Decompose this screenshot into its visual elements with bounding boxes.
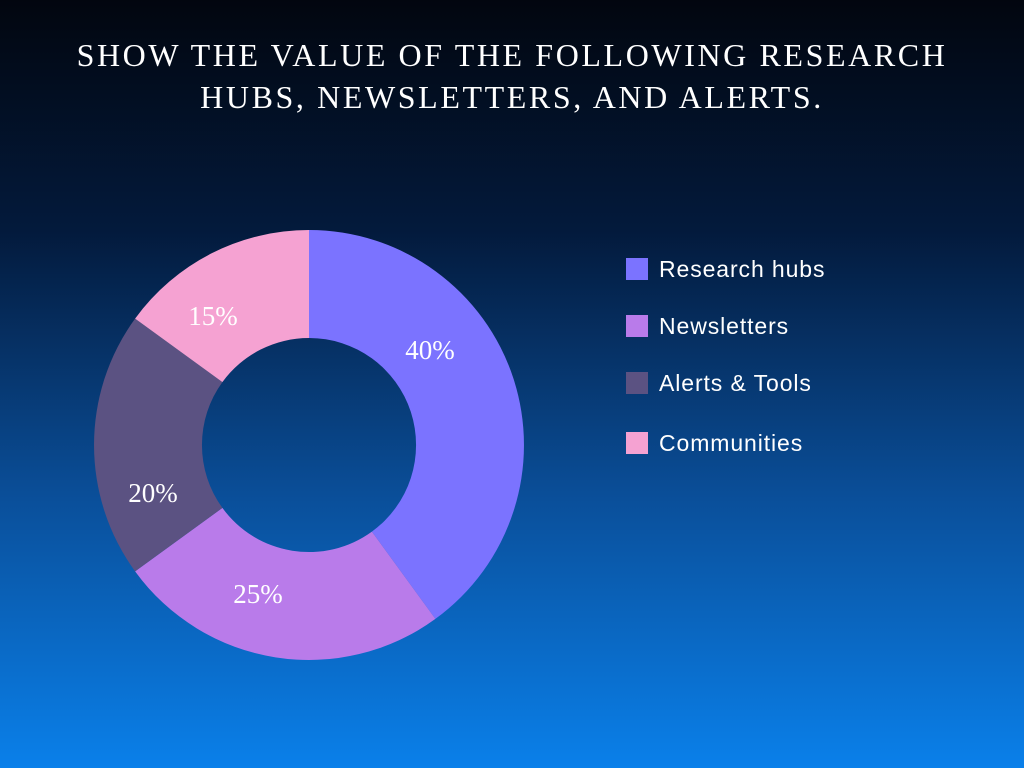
segment: alerts & tools 20%	[94, 319, 222, 571]
segment: newsletters 25%	[135, 508, 435, 660]
labels: 25%	[233, 579, 283, 609]
legend: research hubs: Research hubs	[659, 256, 825, 282]
legend	[626, 256, 825, 456]
title: HUBS, NEWSLETTERS, AND ALERTS.	[200, 79, 824, 115]
labels: 20%	[128, 478, 178, 508]
labels	[128, 301, 455, 609]
title: SHOW THE VALUE OF THE FOLLOWING RESEARCH	[77, 37, 947, 73]
segment: communities 15%	[135, 230, 309, 382]
legend: newsletters: Newsletters	[659, 313, 789, 339]
segment: research hubs 40%	[309, 230, 524, 619]
labels: 15%	[188, 301, 238, 331]
labels: 40%	[405, 335, 455, 365]
title	[77, 37, 947, 115]
legend: communities: Communities	[659, 430, 803, 456]
legend: alerts & tools: Alerts & Tools	[659, 370, 812, 396]
